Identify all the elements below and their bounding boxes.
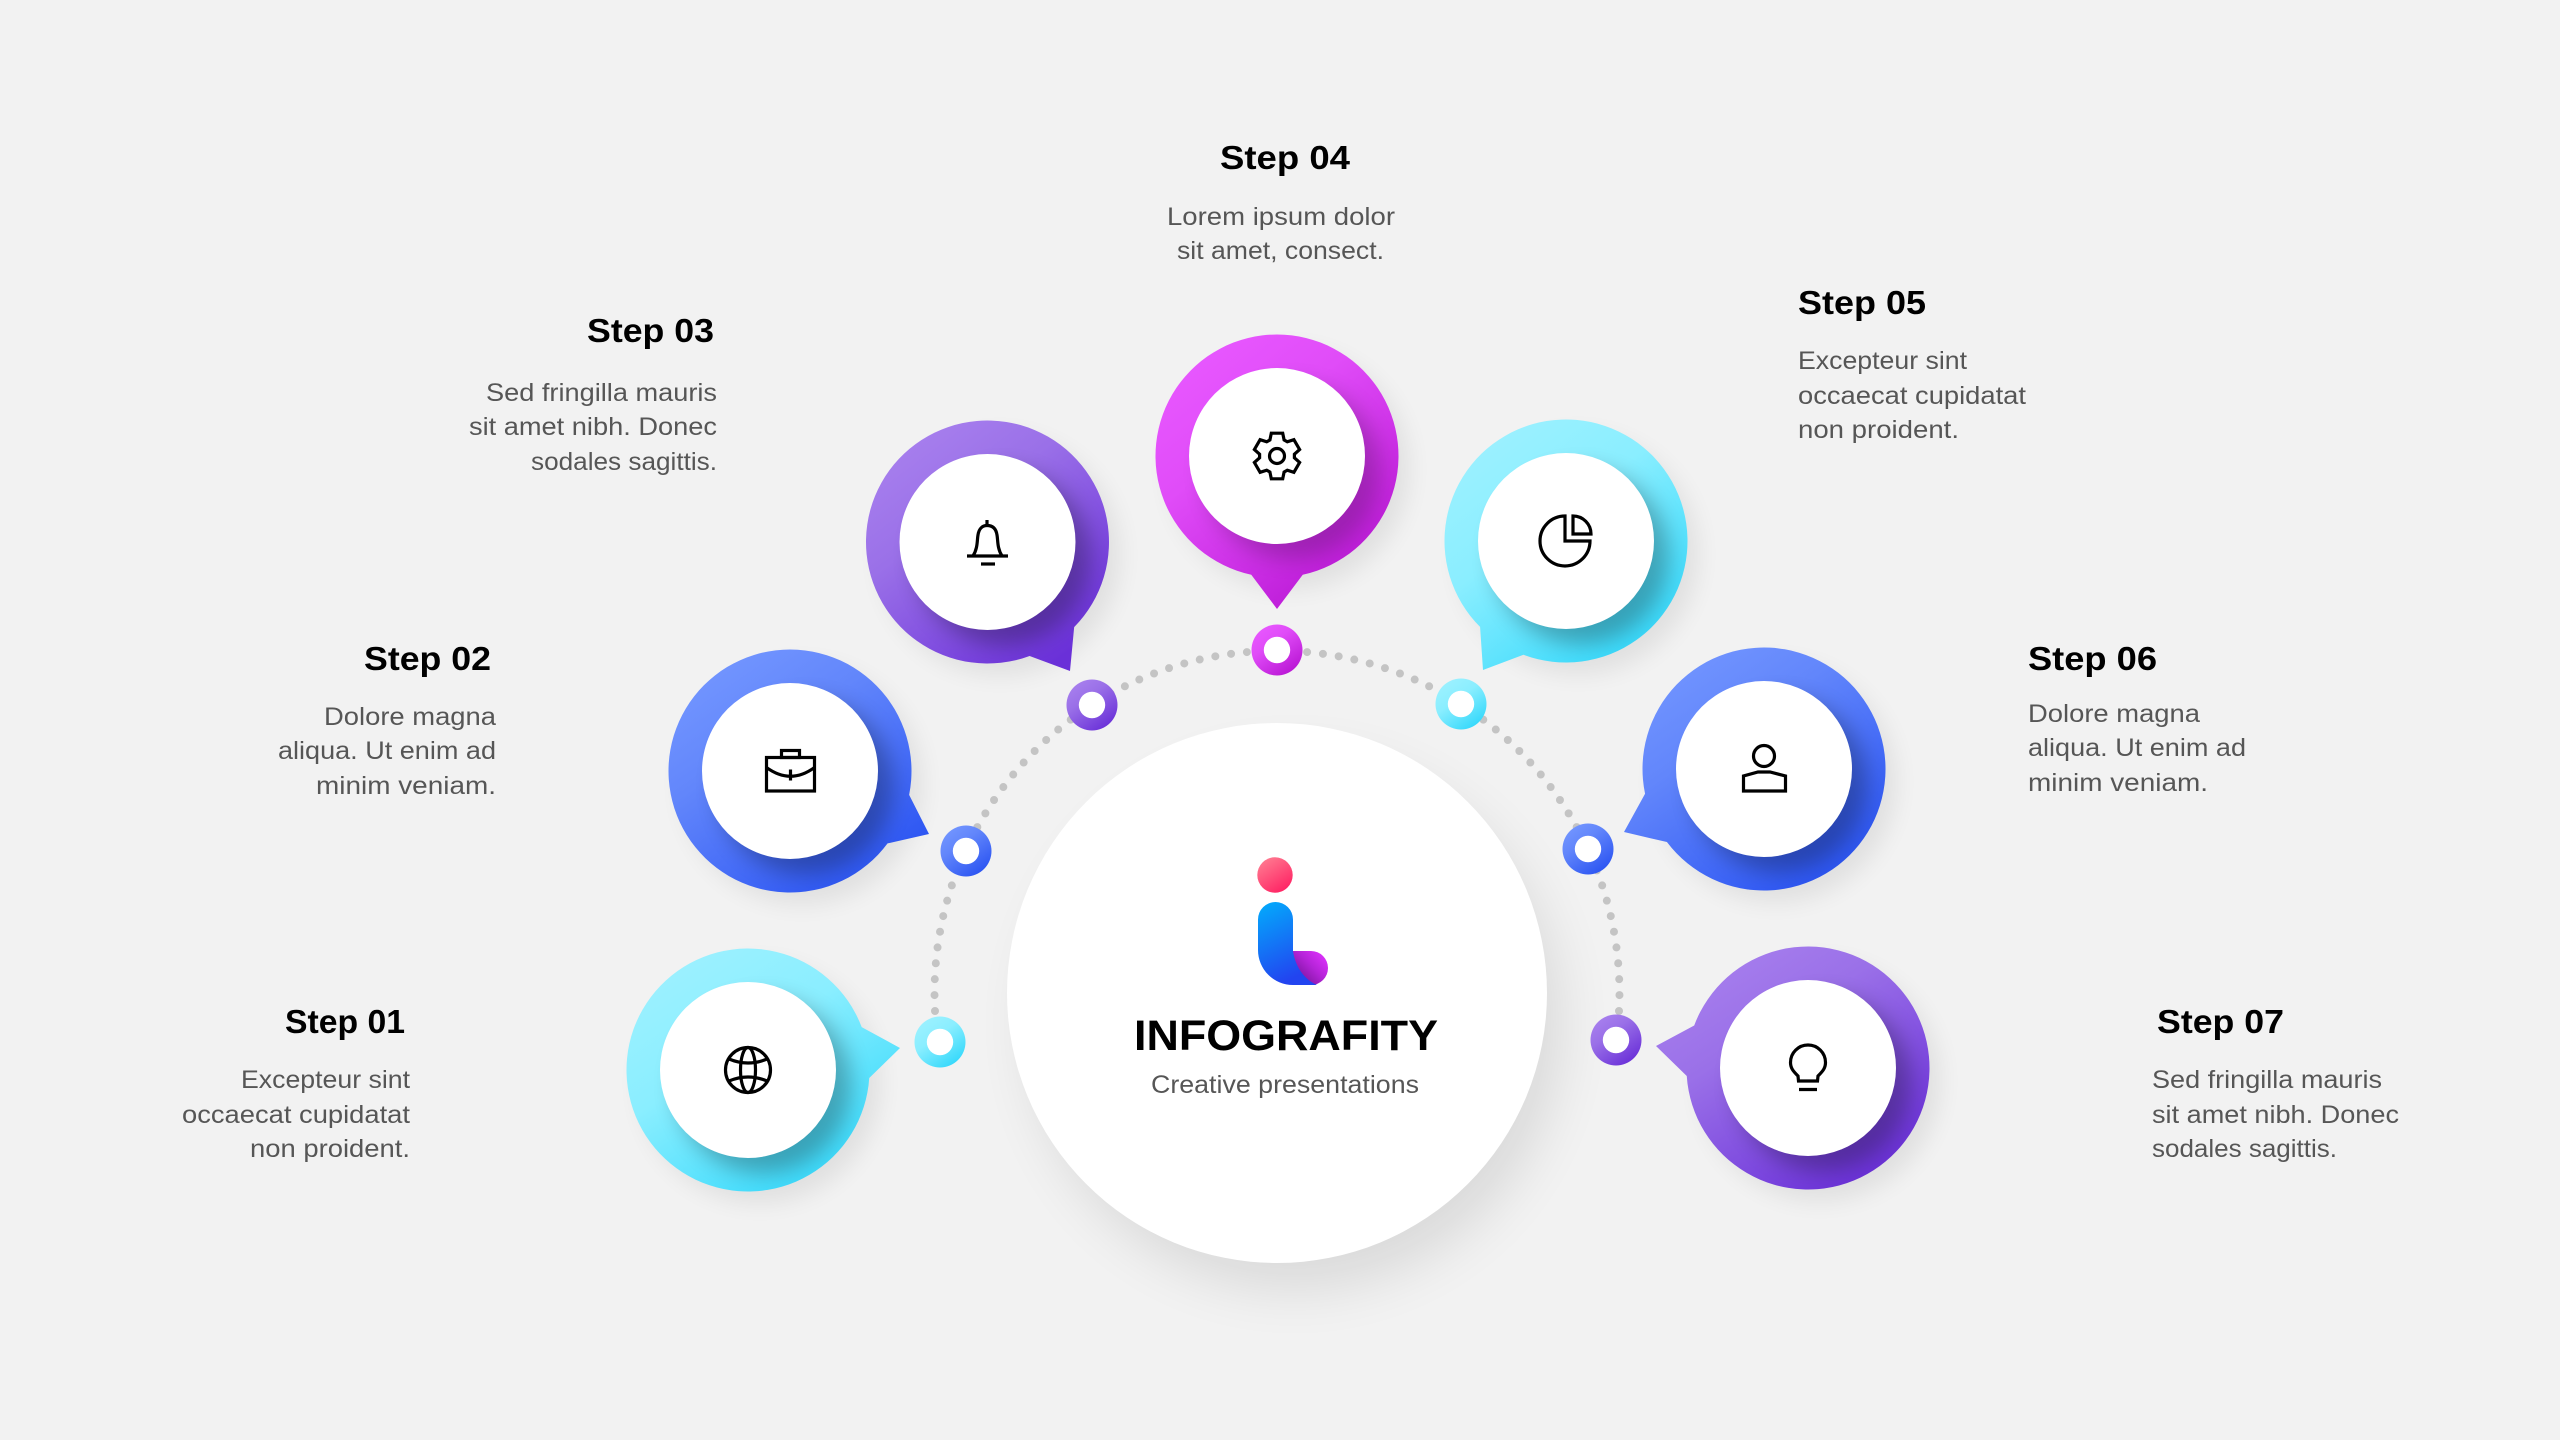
node: step 07 [1590, 1014, 1642, 1066]
center circle panel [1007, 723, 1559, 1288]
bubble: step 07 [1656, 947, 1940, 1201]
text: step 03: Sed fringilla mauris [486, 379, 717, 407]
brand subtitle: Creative presentations [1151, 1071, 1419, 1099]
bubble: step 03 [866, 421, 1120, 675]
brand title: INFOGRAFITY [1134, 1012, 1438, 1060]
icon: gear [1254, 433, 1300, 479]
text: step 06 [2028, 640, 2246, 797]
text: step 03: sodales sagittis. [531, 448, 717, 476]
text: step 07: sit amet nibh. Donec [2152, 1101, 2399, 1129]
text: step 01: occaecat cupidatat [182, 1101, 410, 1129]
node: step 06 [1562, 824, 1614, 874]
text: step 03: sit amet nibh. Donec [469, 413, 717, 441]
text: step 05: Excepteur sint [1798, 347, 1967, 375]
node: step 01 [914, 1016, 966, 1068]
icon: person [1744, 746, 1786, 791]
text: step 02 [278, 640, 496, 800]
text: step 02: Step 02 [364, 640, 491, 677]
dotted arc connecting step nodes [935, 652, 1619, 1011]
text: step 01 [182, 1003, 410, 1163]
icon: pie chart [1540, 516, 1591, 566]
text: step 03 [469, 312, 717, 476]
bubble: step 01 [626, 949, 900, 1203]
icon: globe [726, 1048, 770, 1092]
text: step 06: Step 06 [2028, 640, 2157, 677]
text: step 01: Step 01 [285, 1003, 405, 1040]
text: step 02: Dolore magna [324, 703, 496, 731]
text: step 04: Lorem ipsum dolor [1167, 203, 1395, 231]
text: step 05: non proident. [1798, 416, 1959, 444]
bubble: step 02 [668, 650, 929, 904]
bubble: step 06 [1624, 648, 1896, 902]
text: step 06: Dolore magna [2028, 700, 2200, 728]
text: step 04 [1167, 139, 1395, 265]
node: step 03 [1066, 680, 1118, 730]
node: step 04 [1252, 624, 1302, 676]
text: step 06: minim veniam. [2028, 769, 2208, 797]
text: step 04: sit amet, consect. [1177, 237, 1384, 265]
text: step 03: Step 03 [587, 312, 714, 349]
text: step 05: occaecat cupidatat [1798, 382, 2026, 410]
bubble: step 05 [1445, 419, 1698, 674]
text: step 07: Step 07 [2157, 1003, 2284, 1040]
text: step 02: minim veniam. [316, 772, 496, 800]
node: step 02 [940, 826, 992, 876]
logo [1257, 857, 1328, 985]
text: step 07 [2152, 1003, 2399, 1163]
text: step 05: Step 05 [1798, 284, 1926, 321]
text: step 07: sodales sagittis. [2152, 1135, 2337, 1163]
text: step 01: non proident. [250, 1135, 410, 1163]
icon: briefcase [766, 750, 814, 791]
text: step 07: Sed fringilla mauris [2152, 1066, 2382, 1094]
text: step 06: aliqua. Ut enim ad [2028, 734, 2246, 762]
text: step 05 [1798, 284, 2026, 444]
node: step 05 [1436, 678, 1486, 730]
text: step 04: Step 04 [1220, 139, 1351, 176]
text: step 01: Excepteur sint [241, 1066, 410, 1094]
text: step 02: aliqua. Ut enim ad [278, 737, 496, 765]
icon: bell [967, 520, 1008, 564]
icon: light bulb [1790, 1045, 1826, 1090]
bubble: step 04 [1156, 335, 1409, 609]
